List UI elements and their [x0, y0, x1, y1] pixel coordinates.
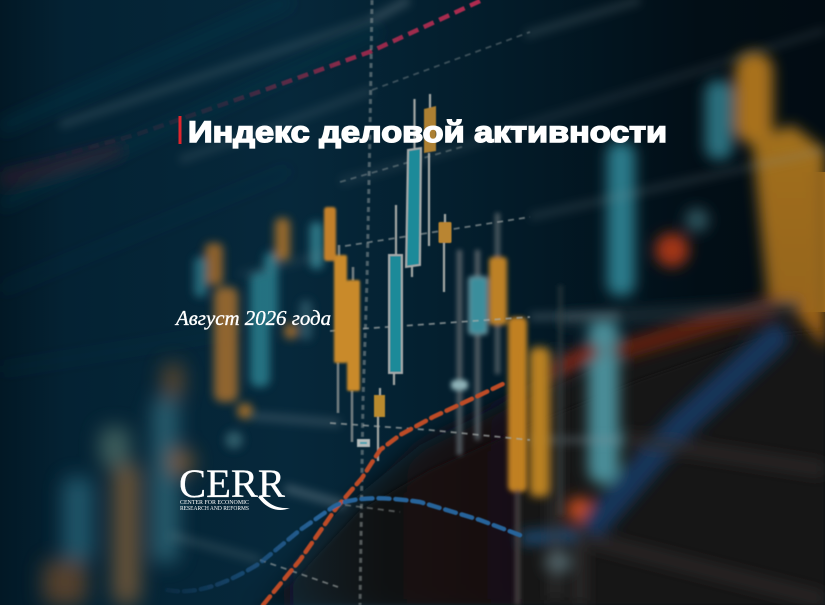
- logo subtitle: RESEARCH AND REFORMS: [180, 506, 249, 512]
- sharp chart layer: [0, 0, 530, 605]
- grid bands: lower right: [555, 305, 825, 605]
- line bands: orange and blue: [525, 306, 775, 538]
- candle: gold small bodies: [374, 106, 452, 417]
- logo subtitle: CENTER FOR ECONOMIC: [180, 500, 249, 506]
- candle: small doji: [357, 439, 370, 447]
- candles: middle right: [451, 213, 563, 605]
- title accent bar: [178, 116, 182, 144]
- candle wicks: [378, 94, 445, 461]
- grid: dashed lines: [260, 0, 530, 605]
- blurred background candles: [525, 52, 825, 605]
- blue dashed curve: [167, 498, 525, 591]
- candles: center gold, slightly soft: [324, 207, 360, 391]
- logo wordmark: CERR: [179, 461, 285, 506]
- candle: teal bodies: [389, 148, 421, 373]
- logo: CERR: [179, 461, 290, 512]
- candles: left cluster far: [43, 363, 194, 605]
- orange dashed curve: [263, 382, 507, 605]
- date: Август 2026 года: [174, 306, 331, 330]
- candle: gold large blurred: [529, 347, 550, 497]
- candles: far right: [545, 52, 825, 574]
- logo subtitle: [180, 500, 249, 512]
- title text: Индекс деловой активности: [188, 116, 667, 149]
- right edge fill: [800, 172, 825, 312]
- title: [178, 116, 667, 149]
- candles: left cluster mid: [194, 218, 323, 449]
- red dashed line: [0, 1, 480, 172]
- logo swash: [258, 496, 290, 510]
